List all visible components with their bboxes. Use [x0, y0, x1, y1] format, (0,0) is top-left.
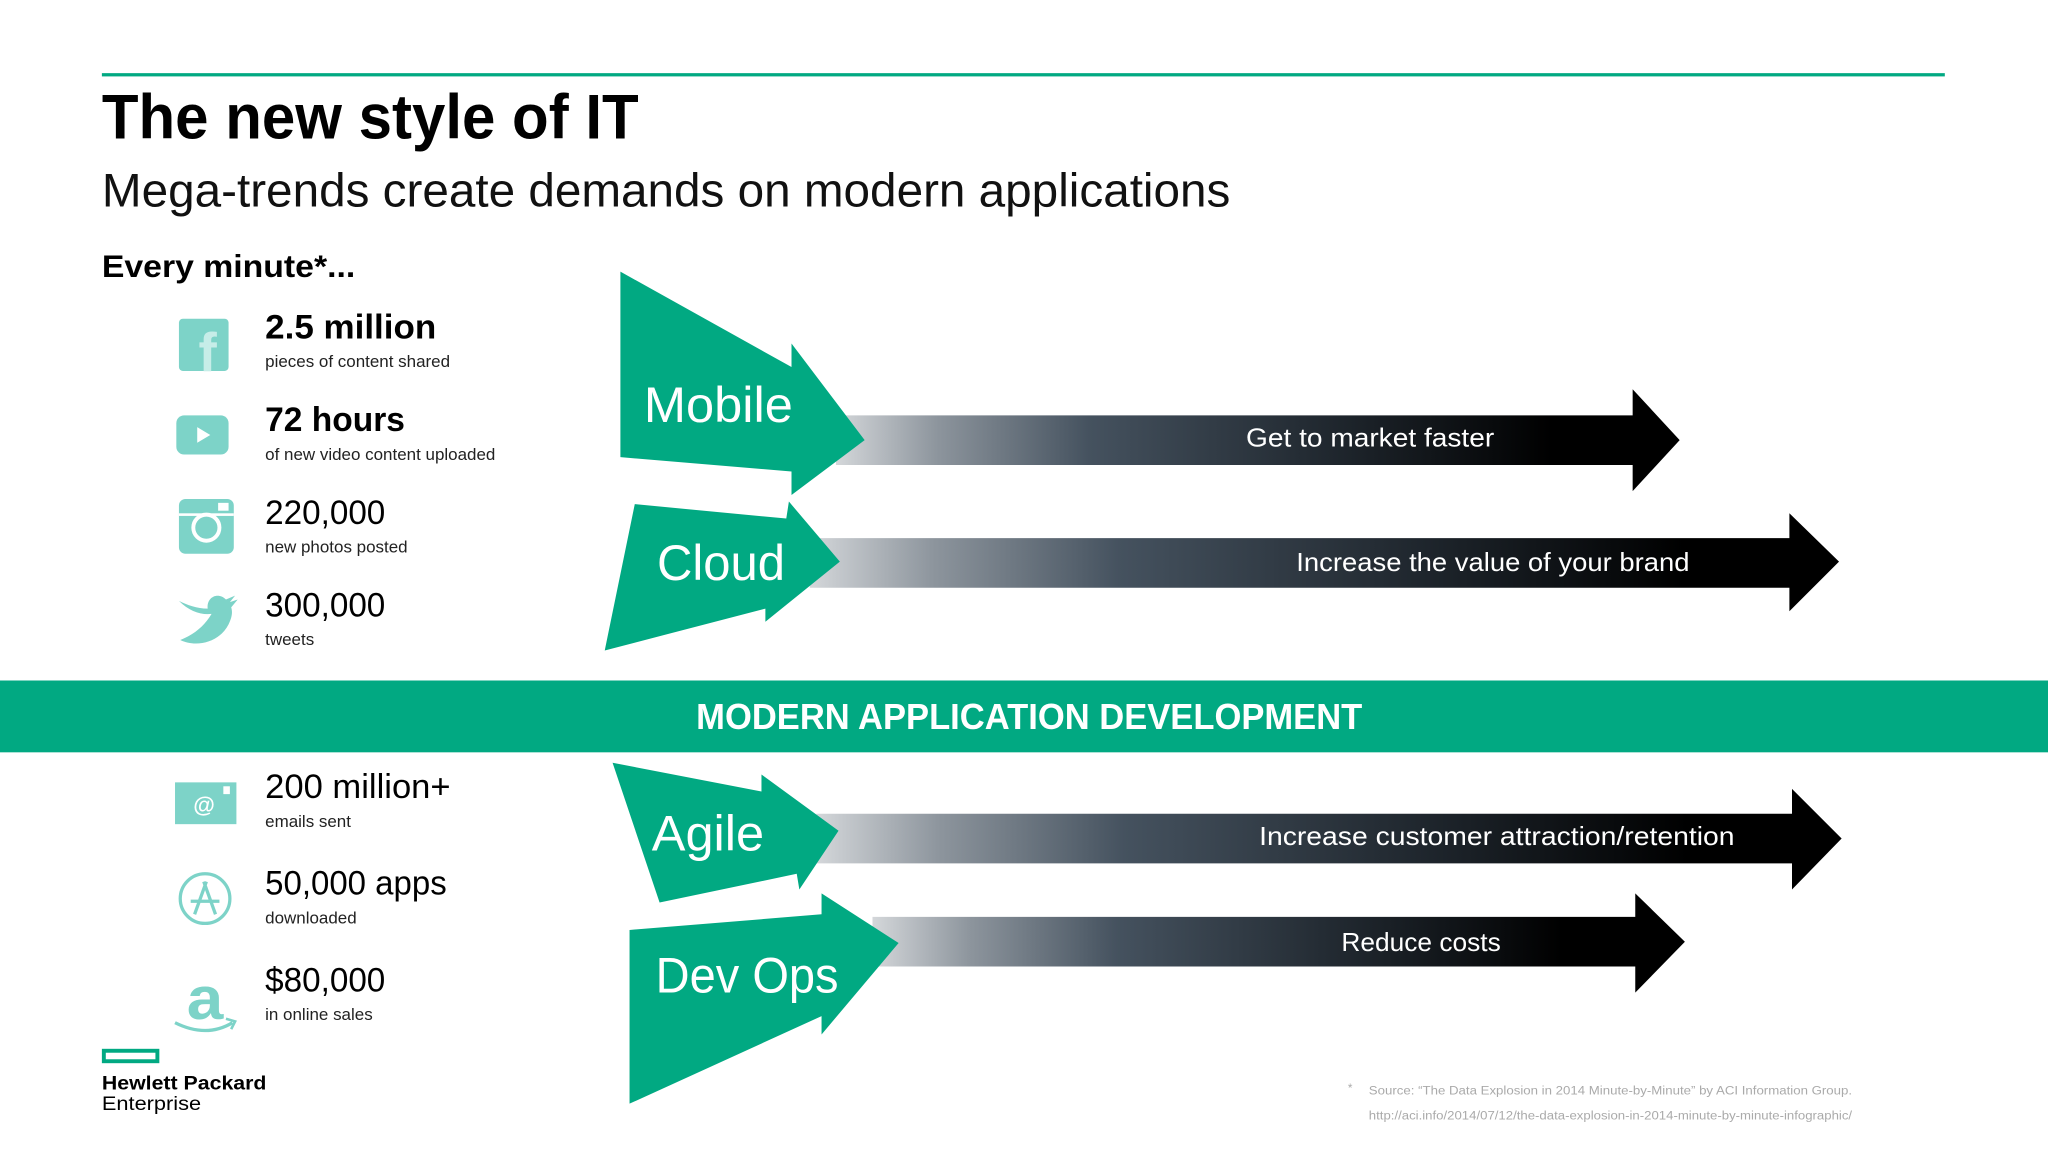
- stat: content shared: 2.5 million: [265, 308, 436, 346]
- stat: tweets: tweets: [265, 630, 314, 649]
- icon: email: @: [193, 792, 215, 817]
- stat: sales: in online sales: [265, 1005, 373, 1024]
- stat: emails: emails sent: [265, 812, 351, 831]
- logo: hewlett packard enterprise: Enterprise: [102, 1093, 201, 1115]
- subtitle: Mega-trends create demands on modern applications: [102, 163, 1230, 216]
- arrow: increase value of brand: [810, 513, 1839, 611]
- stat: tweets: [265, 586, 385, 649]
- footnote: source: *: [1348, 1082, 1353, 1095]
- arrow: customer attraction: [816, 789, 1842, 889]
- stat: apps: 50,000 apps: [265, 865, 447, 903]
- icon: email: [175, 782, 236, 824]
- stat: video hours: 72 hours: [265, 401, 405, 439]
- icon: facebook: f: [199, 321, 218, 383]
- arrow: get to market faster: Get to market faster: [1246, 423, 1495, 453]
- green arrow: agile: Agile: [652, 805, 764, 861]
- arrow: reduce costs: [872, 893, 1685, 993]
- stat: photos: [265, 494, 408, 556]
- stat: video hours: [265, 401, 495, 464]
- stat: apps: downloaded: [265, 908, 357, 927]
- green arrow: cloud: [605, 502, 840, 650]
- footnote: source: http://aci.info/2014/07/12/the-data-explosion-in-2014-minute-by-minute-infographic/: [1369, 1109, 1853, 1122]
- band: modern application development: MODERN APPLICATION DEVELOPMENT: [696, 696, 1362, 737]
- stat: content shared: [265, 308, 450, 371]
- heading: every minute: Every minute*...: [102, 249, 355, 284]
- icon: facebook: [179, 319, 229, 383]
- stat: photos: new photos posted: [265, 537, 408, 556]
- icon: twitter: [179, 596, 238, 644]
- band: modern application development: [0, 680, 2048, 752]
- arrow: reduce costs: Reduce costs: [1341, 927, 1501, 957]
- green arrow: cloud: Cloud: [657, 535, 785, 591]
- arrow: get to market faster: [836, 389, 1680, 491]
- icon: instagram: [179, 499, 234, 554]
- green arrow: dev ops: Dev Ops: [656, 948, 839, 1004]
- stat: sales: [265, 961, 385, 1024]
- icon: app store: [180, 874, 230, 923]
- stat: content shared: pieces of content shared: [265, 352, 450, 371]
- logo: hewlett packard enterprise: Hewlett Packard: [102, 1072, 266, 1094]
- arrow: increase value of brand: Increase the value of your brand: [1296, 547, 1689, 577]
- stat: sales: $80,000: [265, 961, 385, 999]
- stats panel: bottom: [175, 768, 451, 1032]
- green arrow: mobile: [620, 272, 865, 495]
- stats panel: top: [176, 308, 495, 649]
- stat: tweets: 300,000: [265, 586, 385, 624]
- title: The new style of IT: [102, 82, 639, 152]
- icon: youtube: [176, 415, 229, 455]
- arrow: customer attraction: Increase customer attraction/retention: [1259, 821, 1735, 851]
- green arrow: mobile: Mobile: [644, 377, 793, 433]
- stat: photos: 220,000: [265, 494, 385, 532]
- green arrow: dev ops: [630, 893, 899, 1104]
- footnote: source: [1348, 1082, 1853, 1122]
- stat: emails: 200 million+: [265, 768, 451, 806]
- icon: amazon: [175, 965, 235, 1032]
- logo: hewlett packard enterprise: [102, 1051, 266, 1115]
- stat: video hours: of new video content uploaded: [265, 445, 495, 464]
- icon: amazon: a: [187, 965, 224, 1032]
- stat: emails: [265, 768, 451, 831]
- green arrow: agile: [613, 763, 839, 903]
- footnote: source: Source: “The Data Explosion in 2014 Minute-by-Minute” by ACI Information Group.: [1369, 1085, 1852, 1098]
- stat: apps: [265, 865, 447, 927]
